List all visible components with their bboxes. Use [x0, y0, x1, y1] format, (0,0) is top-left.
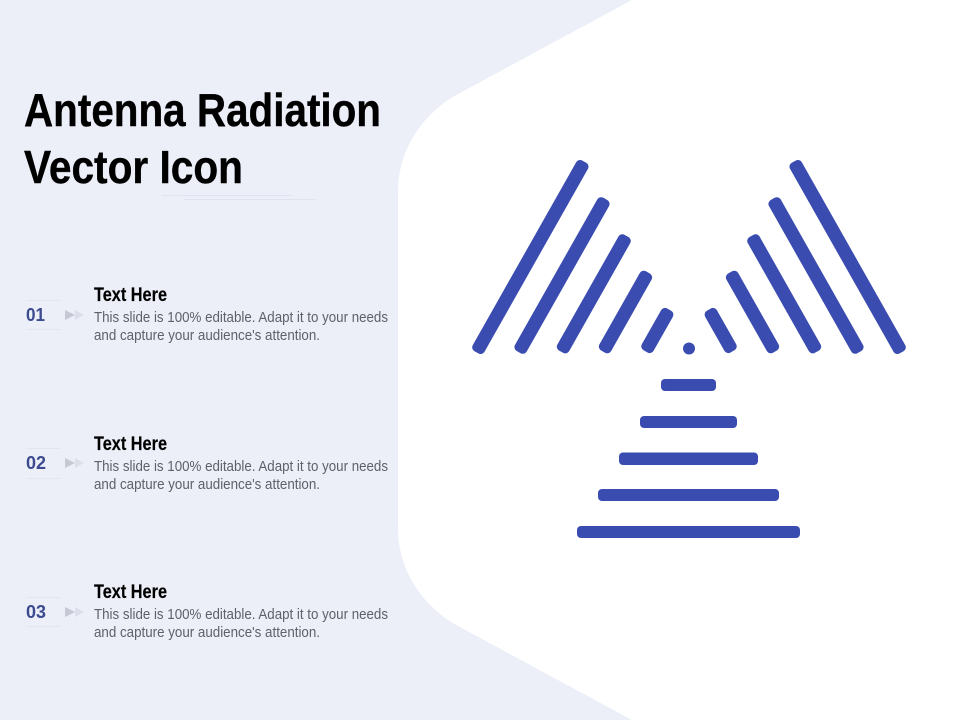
item body: and capture your audience's attention. [94, 328, 320, 344]
number 03: 03 [26, 602, 46, 622]
title: Vector Icon [24, 141, 243, 193]
item heading: Text Here [94, 434, 167, 455]
item body: This slide is 100% editable. Adapt it to your needs [94, 459, 388, 475]
list item 2 [26, 434, 388, 493]
number 02 [26, 448, 60, 479]
item heading: Text Here [94, 582, 167, 603]
item body: This slide is 100% editable. Adapt it to your needs [94, 310, 388, 326]
title underline [162, 195, 315, 200]
title [24, 84, 381, 193]
number 03 [26, 597, 60, 627]
left radiation bars [471, 158, 675, 356]
item heading: Text Here [94, 285, 167, 306]
list item 1 [26, 285, 388, 344]
icon: antenna radiation [471, 158, 907, 538]
item body [94, 310, 388, 344]
title: Antenna Radiation [24, 84, 381, 136]
item body: This slide is 100% editable. Adapt it to your needs [94, 607, 388, 623]
lower radiation bars [577, 379, 800, 538]
number 02: 02 [26, 453, 46, 473]
item body [94, 607, 388, 641]
white hexagon panel [398, 0, 960, 720]
item body: and capture your audience's attention. [94, 477, 320, 493]
centre dot [683, 342, 695, 354]
item body: and capture your audience's attention. [94, 625, 320, 641]
arrow icon [65, 310, 84, 320]
arrow icon [65, 458, 84, 468]
number 01: 01 [26, 305, 45, 325]
item body [94, 459, 388, 493]
right radiation bars [703, 158, 907, 356]
number 01 [26, 300, 60, 330]
arrow icon [65, 607, 84, 617]
list item 3 [26, 582, 388, 641]
